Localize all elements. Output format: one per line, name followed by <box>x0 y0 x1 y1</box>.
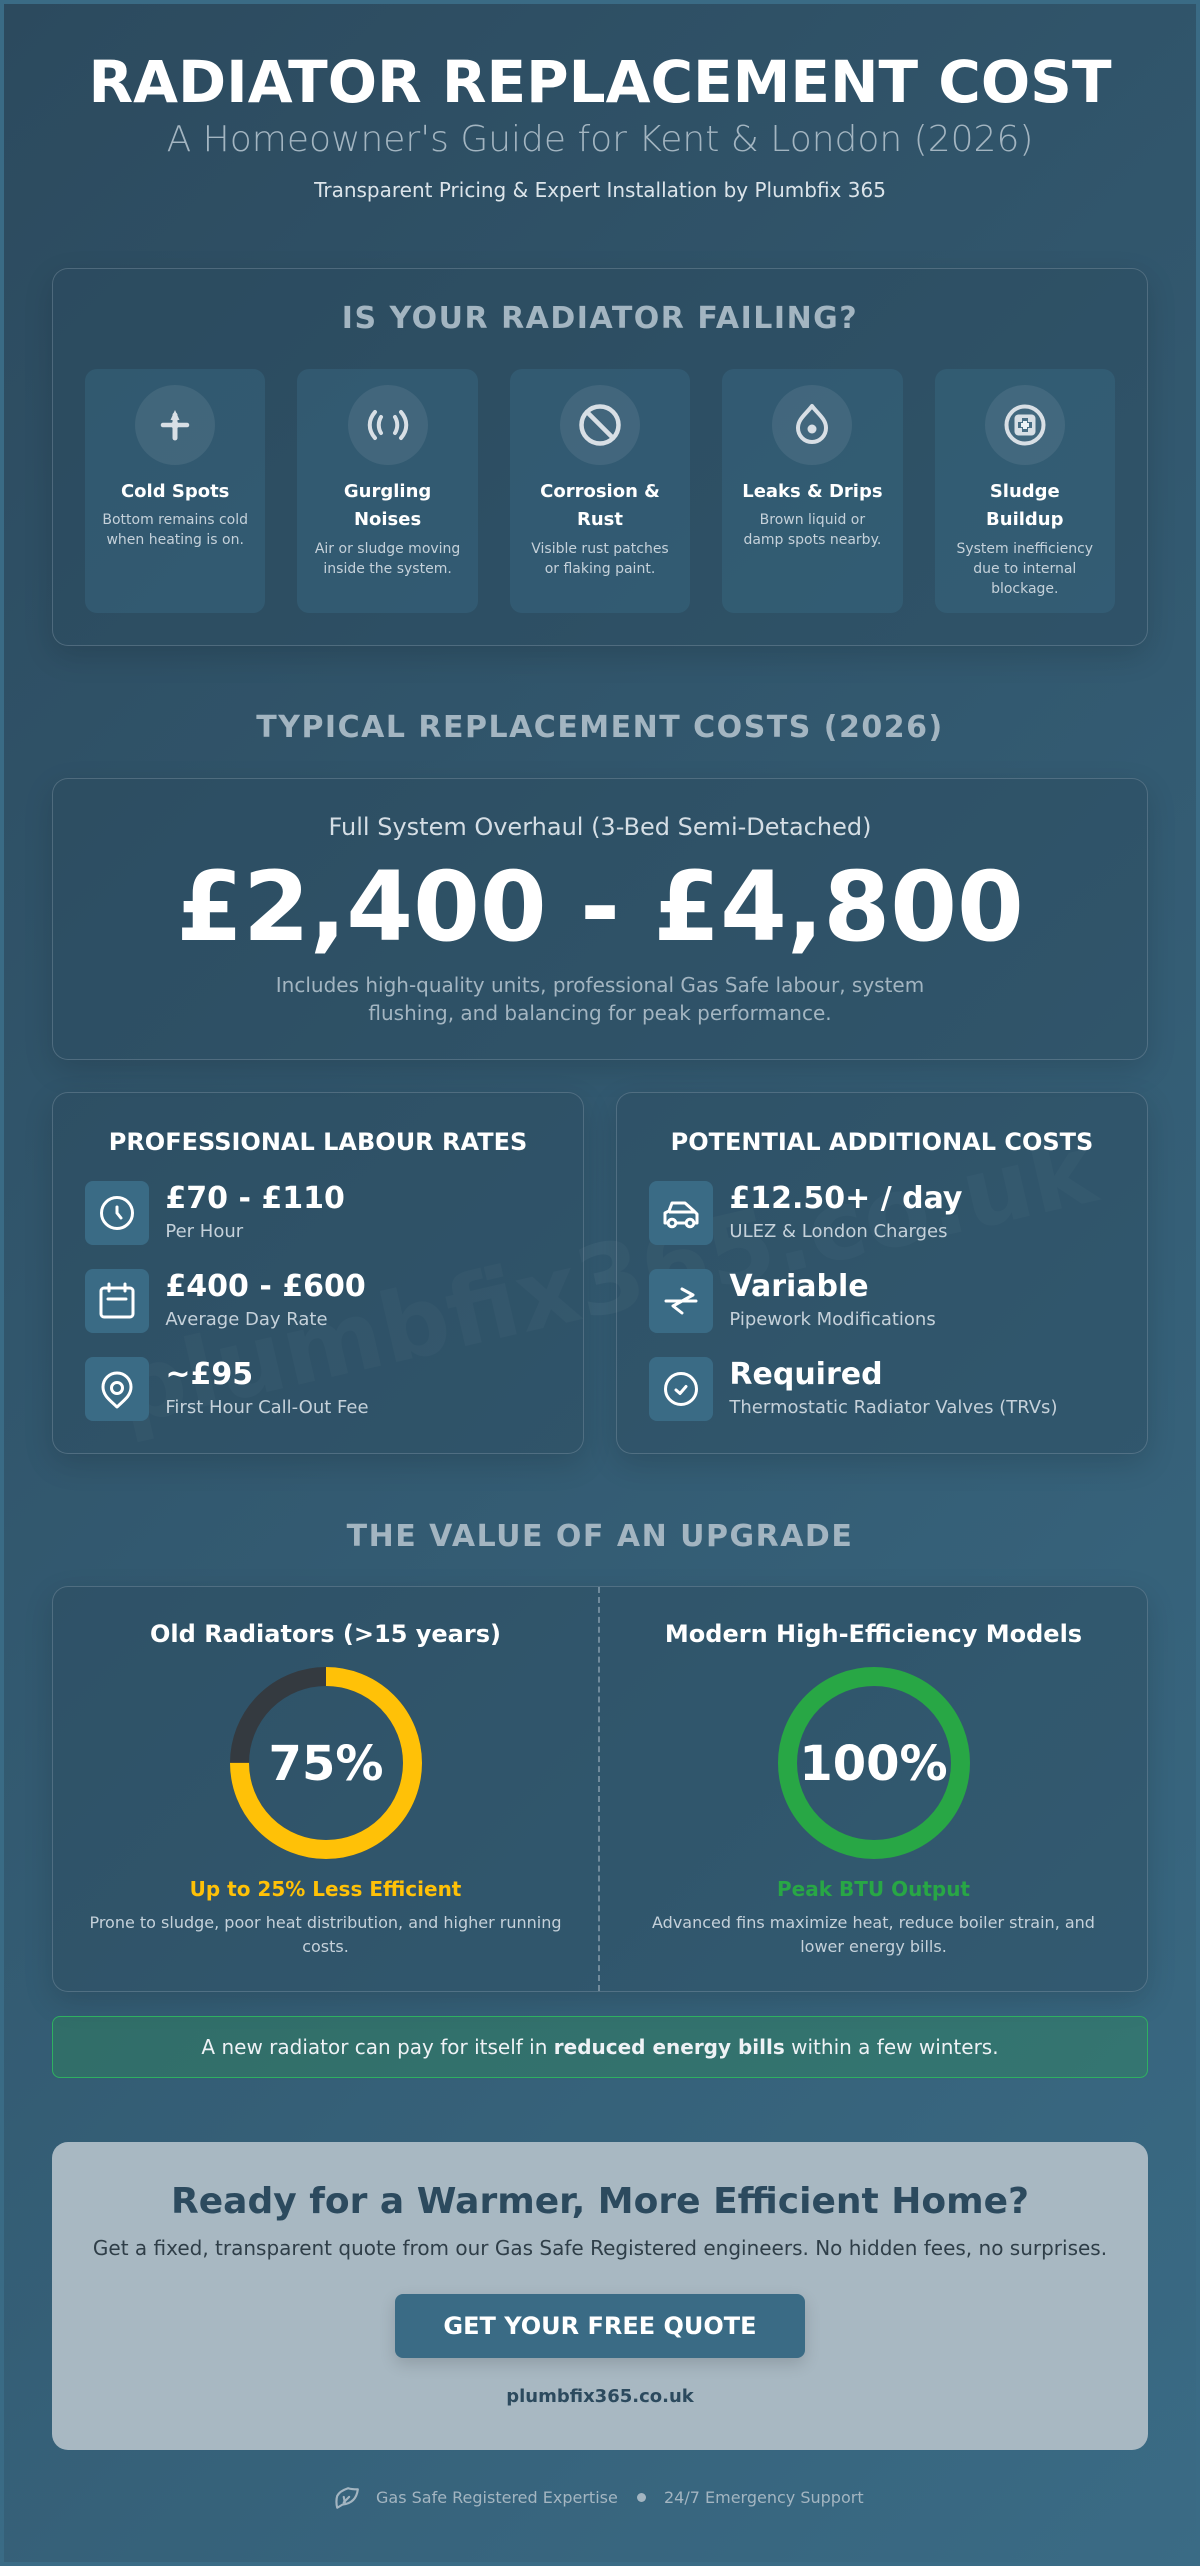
symptom card: cold spots <box>85 369 265 613</box>
symptom card: sludge buildup: System inefficiency <box>956 541 1093 557</box>
button: GET YOUR FREE QUOTE <box>443 2312 757 2340</box>
icon: location pin <box>85 1357 149 1421</box>
icon: clock <box>85 1181 149 1245</box>
donut value: 75% <box>269 1736 383 1792</box>
heading: is your radiator failing: IS YOUR RADIATOR FAILING? <box>342 301 858 336</box>
cta heading: Ready for a Warmer, More Efficient Home? <box>171 2181 1029 2222</box>
donut chart: 100% <box>778 1667 970 1859</box>
price description <box>276 972 924 1024</box>
column description: Prone to sludge, poor heat distribution, and higher running <box>89 1913 562 1932</box>
callout: energy bills <box>52 2016 1148 2078</box>
symptom card: leaks and drips: Brown liquid or <box>760 512 865 528</box>
donut value: 100% <box>799 1736 948 1792</box>
symptom card: corrosion and rust <box>510 369 690 613</box>
label: trvs: Thermostatic Radiator Valves (TRVs) <box>729 1396 1057 1418</box>
price description: flushing, and balancing for peak performance. <box>368 1000 832 1024</box>
label: ulez: ULEZ & London Charges <box>729 1220 947 1242</box>
divider <box>598 1587 600 1991</box>
panel: potential additional costs <box>616 1092 1148 1454</box>
cost: ulez: £12.50+ / day <box>729 1181 962 1216</box>
symptom card: corrosion and rust: Visible rust patches <box>531 541 669 557</box>
tagline: Transparent Pricing & Expert Installation by Plumbfix 365 <box>314 178 886 202</box>
column heading: Old Radiators (>15 years) <box>150 1620 501 1648</box>
icon: pipework <box>649 1269 713 1333</box>
symptom card: sludge buildup: Sludge <box>990 481 1060 502</box>
label: day rate: Average Day Rate <box>165 1308 328 1330</box>
cost: trvs: Required <box>729 1357 883 1392</box>
symptom card: corrosion and rust: or flaking paint. <box>545 561 655 577</box>
donut chart: 75% <box>230 1667 422 1859</box>
icon: leaf badge <box>335 2487 359 2509</box>
icon: prohibited circle <box>560 385 640 465</box>
status: peak output: Peak BTU Output <box>777 1877 970 1901</box>
column heading: Modern High-Efficiency Models <box>665 1620 1082 1648</box>
panel: full system price <box>52 778 1148 1060</box>
price label: Full System Overhaul (3-Bed Semi-Detached) <box>329 813 871 841</box>
panel: professional labour rates <box>52 1092 584 1454</box>
rate: call-out: ~£95 <box>165 1357 253 1392</box>
panel: call to action <box>52 2142 1148 2450</box>
subtitle: A Homeowner's Guide for Kent & London (2026) <box>167 119 1033 160</box>
website: plumbfix365.co.uk <box>506 2386 694 2407</box>
column description: lower energy bills. <box>800 1937 947 1956</box>
rate: per hour: £70 - £110 <box>165 1181 345 1216</box>
column: modern radiators <box>652 1620 1095 1956</box>
callout: energy bills: A new radiator can pay for itself in reduced energy bills within a few winters. <box>201 2035 999 2059</box>
symptom card: sludge buildup: due to internal <box>973 561 1076 577</box>
symptom card: corrosion and rust: Corrosion & <box>540 481 660 502</box>
symptom card: cold spots: Cold Spots <box>121 481 229 502</box>
footer <box>335 2487 864 2509</box>
symptom card: gurgling noises: Noises <box>354 509 421 530</box>
symptom card: gurgling noises <box>297 369 478 613</box>
title: RADIATOR REPLACEMENT COST <box>88 48 1112 116</box>
symptom card: sludge buildup <box>935 369 1115 613</box>
icon: calendar <box>85 1269 149 1333</box>
cost: pipework: Variable <box>729 1269 869 1304</box>
button <box>395 2294 805 2358</box>
icon: car <box>649 1181 713 1245</box>
heading: typical replacement costs: TYPICAL REPLACEMENT COSTS (2026) <box>256 710 944 745</box>
heading: the value of an upgrade: THE VALUE OF AN UPGRADE <box>347 1519 853 1554</box>
symptom card: leaks and drips: Leaks & Drips <box>742 481 883 502</box>
panel heading: PROFESSIONAL LABOUR RATES <box>109 1128 527 1156</box>
column description: costs. <box>302 1937 349 1956</box>
symptom card: cold spots: when heating is on. <box>106 532 244 548</box>
watermark: plumbfix365.co.uk <box>105 1113 1105 1447</box>
symptom card: leaks and drips: damp spots nearby. <box>743 532 881 548</box>
symptom card: gurgling noises: inside the system. <box>323 561 452 577</box>
label: per hour: Per Hour <box>165 1220 243 1242</box>
price range: £2,400 - £4,800 <box>176 851 1024 963</box>
symptom card: cold spots: Bottom remains cold <box>102 512 248 528</box>
icon: sound waves <box>348 385 428 465</box>
panel heading: POTENTIAL ADDITIONAL COSTS <box>671 1128 1093 1156</box>
panel: efficiency comparison <box>52 1586 1148 1992</box>
column description <box>652 1913 1095 1956</box>
column: old radiators <box>89 1620 562 1956</box>
label: pipework: Pipework Modifications <box>729 1308 936 1330</box>
footer text: expertise: Gas Safe Registered Expertise <box>376 2488 618 2506</box>
rate: day rate: £400 - £600 <box>165 1269 366 1304</box>
icon: sludge disc <box>985 385 1065 465</box>
status: less efficient: Up to 25% Less Efficient <box>190 1877 461 1901</box>
footer dot <box>637 2493 646 2502</box>
symptom card: gurgling noises: Air or sludge moving <box>315 541 460 557</box>
price description: Includes high-quality units, professional Gas Safe labour, system <box>276 972 924 996</box>
label: call-out: First Hour Call-Out Fee <box>165 1396 369 1418</box>
symptom card: corrosion and rust: Rust <box>577 509 623 530</box>
icon: water drop <box>772 385 852 465</box>
column description <box>89 1913 562 1956</box>
symptom card: gurgling noises: Gurgling <box>344 481 431 502</box>
icon: cold spots <box>135 385 215 465</box>
symptom card: sludge buildup: Buildup <box>986 509 1064 530</box>
panel: is your radiator failing <box>52 268 1148 646</box>
symptom card: sludge buildup: blockage. <box>991 581 1058 597</box>
column description: Advanced fins maximize heat, reduce boiler strain, and <box>652 1913 1095 1932</box>
symptom card: leaks and drips <box>722 369 903 613</box>
icon: check circle <box>649 1357 713 1421</box>
footer text: support: 24/7 Emergency Support <box>664 2488 864 2506</box>
cta text: Get a fixed, transparent quote from our Gas Safe Registered engineers. No hidden fees, no surprises. <box>93 2236 1107 2260</box>
